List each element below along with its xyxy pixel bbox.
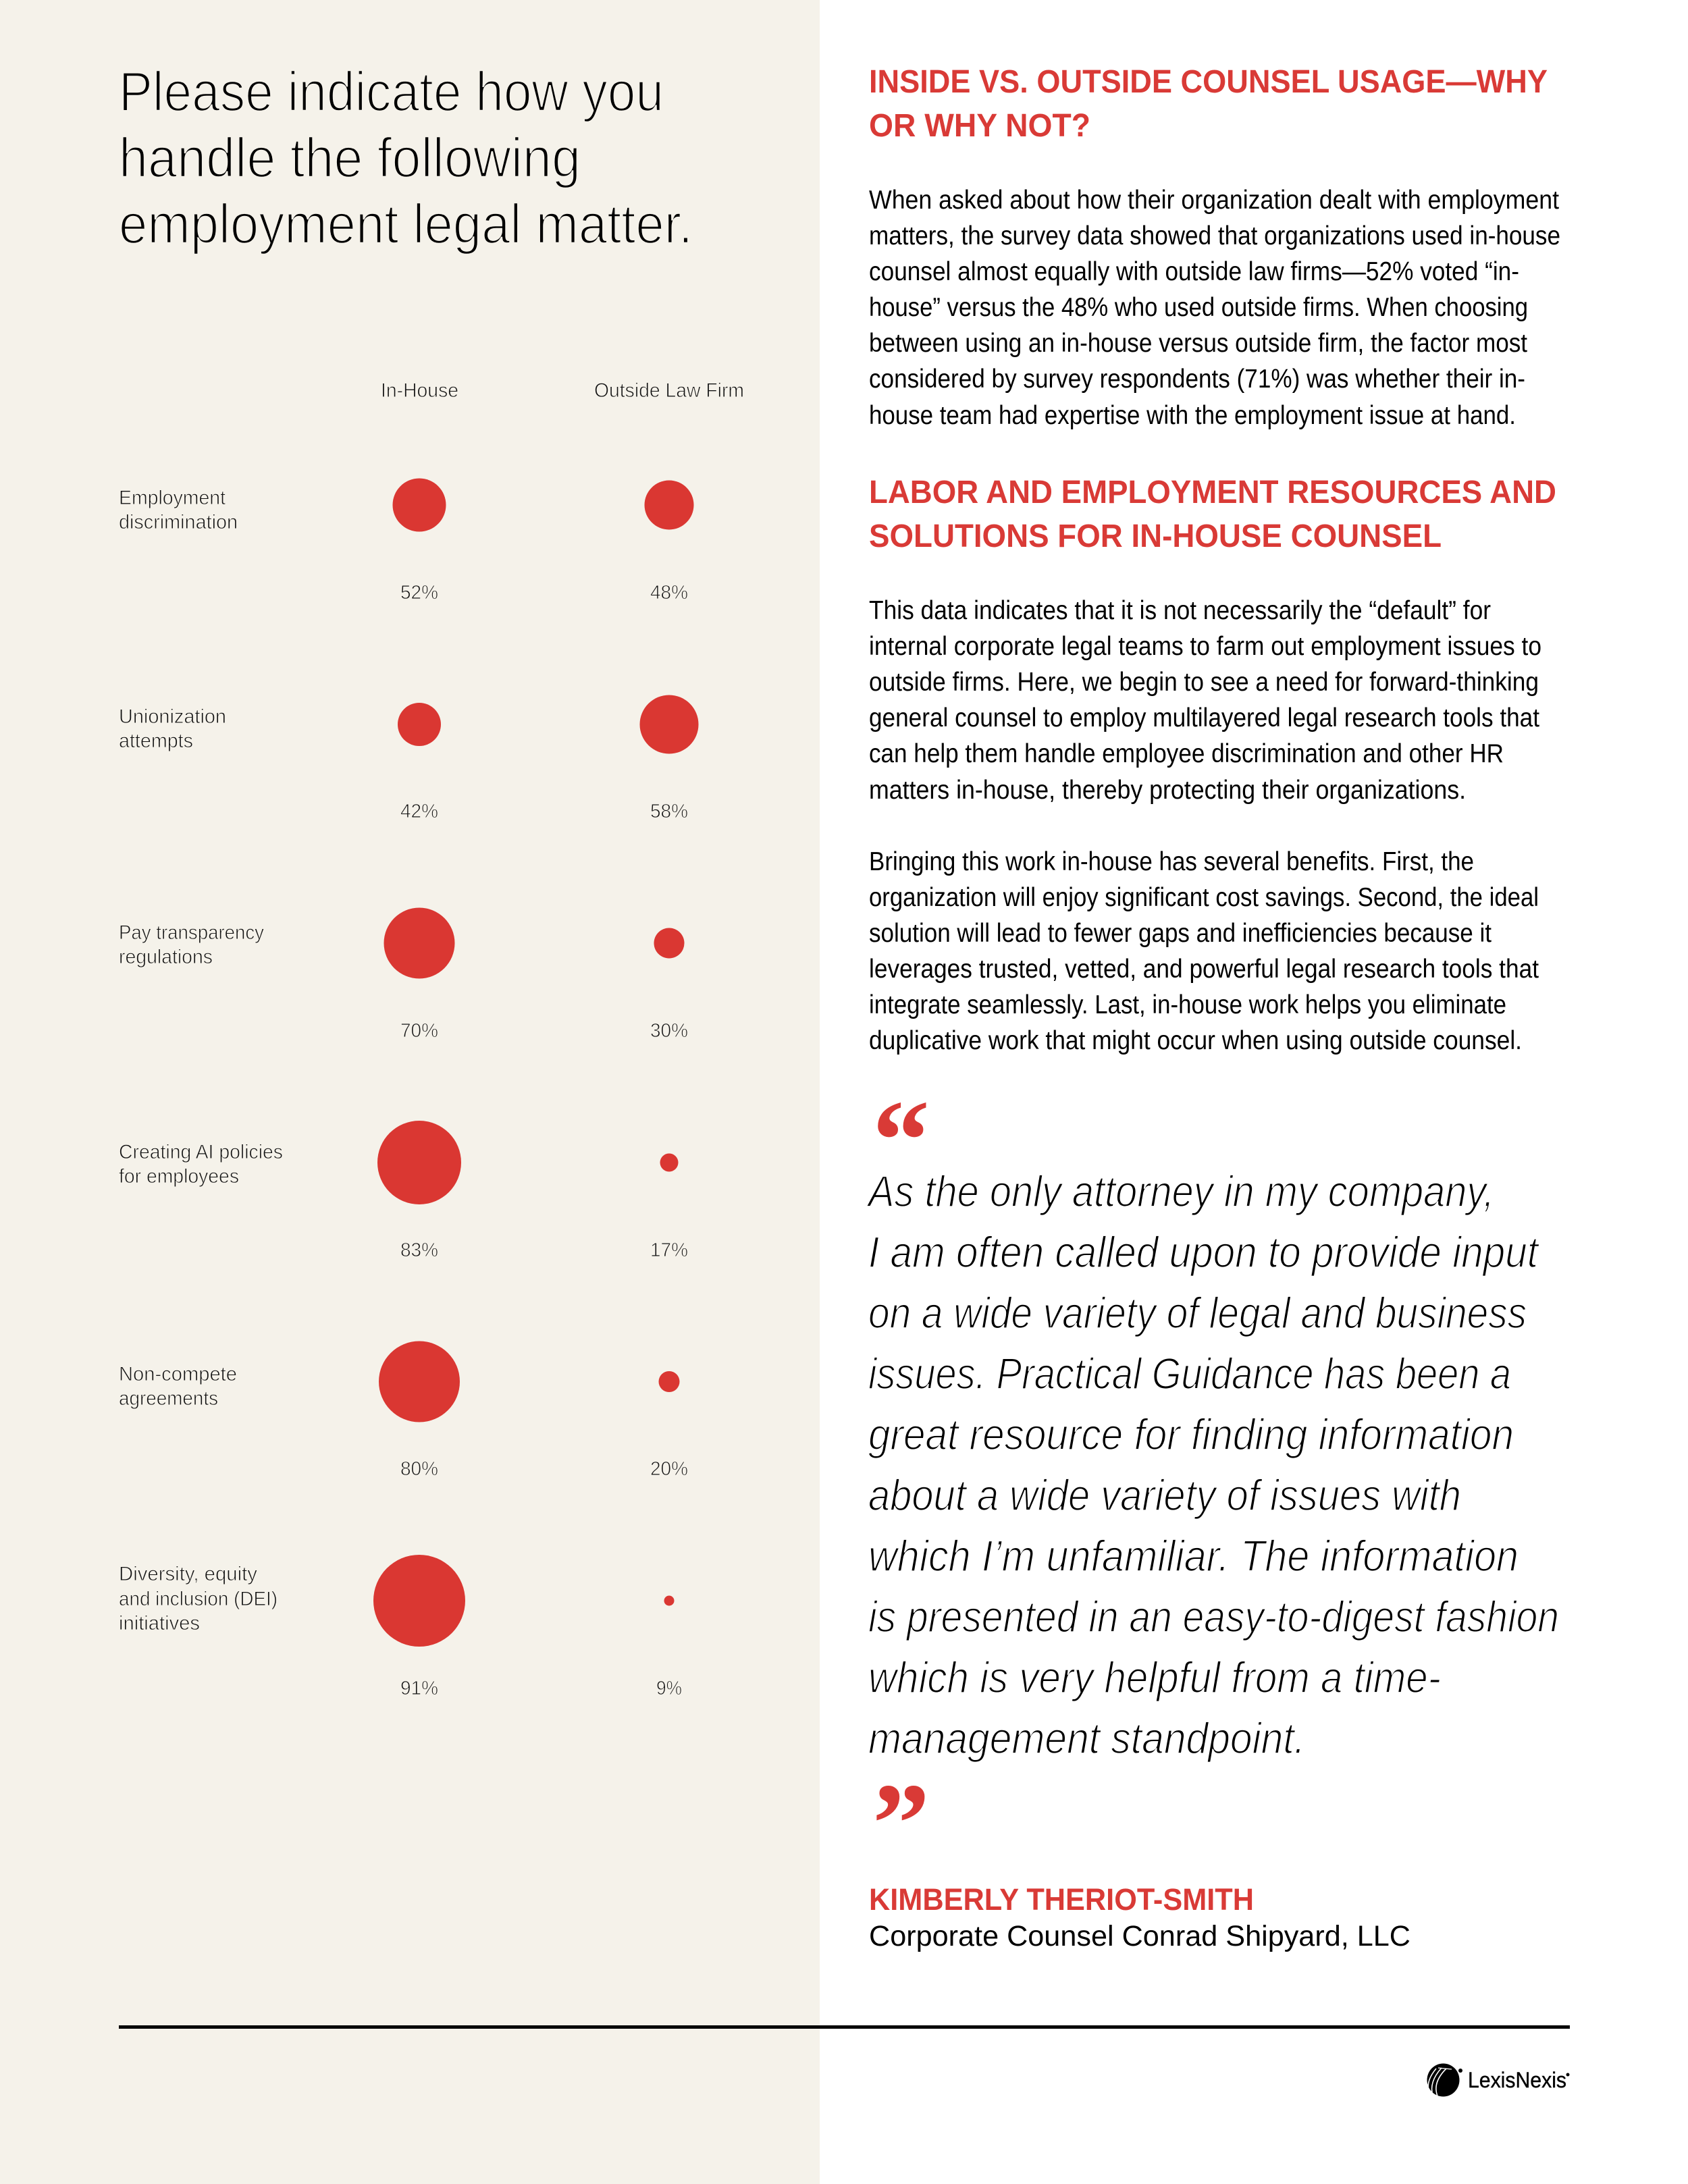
attribution: KIMBERLY THERIOT-SMITH [869, 1882, 1254, 1917]
row: Pay transparency regulations: 30% [650, 1020, 688, 1042]
column header: Outside Law Firm: Outside Law Firm [594, 379, 744, 402]
row: Non-compete agreements: 20% [650, 1458, 688, 1480]
row: Employment discrimination: Employment [119, 487, 226, 509]
pull quote: I am often called upon to provide input [868, 1227, 1540, 1277]
row: Diversity, equity and inclusion initiatives: 9% [656, 1678, 682, 1699]
row: Unionization attempts: Unionization [119, 705, 226, 728]
text block: survey findings: counsel almost equally with outside law firms—52% voted “in- [869, 257, 1519, 286]
row: Pay transparency regulations: regulations [119, 946, 213, 968]
text block: need for research tools [869, 596, 1541, 805]
icon: LexisNexis globe [1427, 2063, 1462, 2098]
text block: benefits of in-house work: integrate seamlessly. Last, in-house work helps you eliminate [869, 990, 1506, 1019]
heading: inside vs outside counsel usage: OR WHY NOT? [869, 108, 1090, 144]
pull quote: great resource for finding information [868, 1410, 1514, 1459]
row: Creating AI policies for employees: for employees [119, 1165, 239, 1188]
row: Non-compete agreements: agreements [119, 1387, 218, 1410]
heading: labor and employment resources: SOLUTIONS FOR IN-HOUSE COUNSEL [869, 518, 1442, 554]
row: Creating AI policies for employees: 17% [650, 1240, 688, 1261]
pull quote: which I’m unfamiliar. The information [868, 1531, 1519, 1580]
pull quote: issues. Practical Guidance has been a [868, 1349, 1511, 1398]
pull quote: on a wide variety of legal and business [868, 1288, 1527, 1337]
text block: need for research tools: This data indicates that it is not necessarily the “default” for [869, 596, 1491, 625]
row: Employment discrimination: 48% [650, 582, 688, 604]
row: Unionization attempts: attempts [119, 730, 193, 752]
row: Creating AI policies for employees: 83% [400, 1240, 438, 1261]
row: Non-compete agreements: Non-compete [119, 1363, 237, 1385]
row: Non-compete agreements: 80% [400, 1458, 438, 1480]
title [119, 60, 693, 255]
footer rule [119, 2025, 1570, 2029]
row: Diversity, equity and inclusion initiatives: Diversity, equity [119, 1563, 257, 1585]
logo: LexisNexis: LexisNexis [1468, 2068, 1566, 2092]
pull quote: As the only attorney in my company, [866, 1167, 1494, 1216]
text block: benefits of in-house work: solution will lead to fewer gaps and inefficiencies because it [869, 919, 1492, 948]
row: Pay transparency regulations: Pay transparency [119, 922, 264, 944]
icon: closing quotation mark: ” [872, 1760, 930, 1887]
text block: need for research tools: general counsel to employ multilayered legal research tools that [869, 703, 1539, 733]
text block: survey findings [869, 186, 1560, 430]
text block: benefits of in-house work: leverages trusted, vetted, and powerful legal research tools that [869, 955, 1539, 984]
pull quote: is presented in an easy-to-digest fashion [868, 1592, 1559, 1641]
row: Creating AI policies for employees [119, 1121, 688, 1261]
text block: benefits of in-house work: Bringing this work in-house has several benefits. First, the [869, 847, 1474, 876]
pull quote: management standpoint. [868, 1713, 1305, 1763]
text block: survey findings: When asked about how their organization dealt with employment [869, 186, 1559, 215]
row: Diversity, equity and inclusion initiatives [119, 1555, 682, 1699]
heading: labor and employment resources: LABOR AND EMPLOYMENT RESOURCES AND [869, 475, 1556, 510]
column header: In-House: In-House [381, 379, 458, 402]
text block: benefits of in-house work: duplicative work that might occur when using outside counsel. [869, 1026, 1522, 1055]
text block: survey findings: matters, the survey data showed that organizations used in-house [869, 221, 1560, 250]
row: Employment discrimination: discrimination [119, 511, 238, 533]
text block: need for research tools: outside firms. Here, we begin to see a need for forward-thinking [869, 668, 1539, 697]
title: handle the following [119, 126, 581, 189]
row: Unionization attempts: 42% [400, 801, 438, 822]
title: Please indicate how you [119, 60, 664, 123]
pull quote [866, 1167, 1559, 1763]
panel: beige left background [0, 0, 820, 2184]
row: Diversity, equity and inclusion initiatives: 91% [400, 1678, 438, 1699]
heading: inside vs outside counsel usage: INSIDE VS. OUTSIDE COUNSEL USAGE—WHY [869, 64, 1548, 100]
row: Creating AI policies for employees: Creating AI policies [119, 1141, 283, 1163]
text block: survey findings: considered by survey respondents (71%) was whether their in- [869, 365, 1525, 394]
text block: need for research tools: can help them handle employee discrimination and other HR [869, 739, 1504, 768]
row: Non-compete agreements [119, 1341, 688, 1480]
attribution [869, 1882, 1410, 1952]
heading: labor and employment resources [869, 475, 1556, 554]
heading: inside vs outside counsel usage [869, 64, 1548, 144]
logo: LexisNexis [1427, 2063, 1569, 2098]
row: Pay transparency regulations: 70% [400, 1020, 438, 1042]
pull quote: about a wide variety of issues with [868, 1470, 1461, 1520]
row: Pay transparency regulations [119, 907, 688, 1042]
text block: need for research tools: matters in-house, thereby protecting their organizations. [869, 776, 1466, 805]
row: Unionization attempts: 58% [650, 801, 688, 822]
row: Unionization attempts [119, 695, 698, 822]
text block: benefits of in-house work: organization will enjoy significant cost savings. Second, the ideal [869, 883, 1539, 912]
row: Employment discrimination: 52% [400, 582, 438, 604]
text block: benefits of in-house work [869, 847, 1539, 1055]
row: Diversity, equity and inclusion initiatives: initiatives [119, 1612, 200, 1634]
text block: need for research tools: internal corporate legal teams to farm out employment issues to [869, 632, 1541, 661]
text block: survey findings: house” versus the 48% who used outside firms. When choosing [869, 293, 1528, 322]
row: Employment discrimination [119, 478, 694, 604]
text block: survey findings: between using an in-house versus outside firm, the factor most [869, 329, 1527, 358]
title: employment legal matter. [119, 192, 693, 255]
attribution: Corporate Counsel Conrad Shipyard, LLC [869, 1920, 1410, 1952]
pull quote: which is very helpful from a time- [868, 1653, 1441, 1702]
text block: survey findings: house team had expertise with the employment issue at hand. [869, 401, 1516, 430]
icon: opening quotation mark: “ [872, 1077, 930, 1204]
bubble chart: in-house vs outside law firm [119, 379, 744, 1699]
row: Diversity, equity and inclusion initiatives: and inclusion (DEI) [119, 1588, 278, 1610]
